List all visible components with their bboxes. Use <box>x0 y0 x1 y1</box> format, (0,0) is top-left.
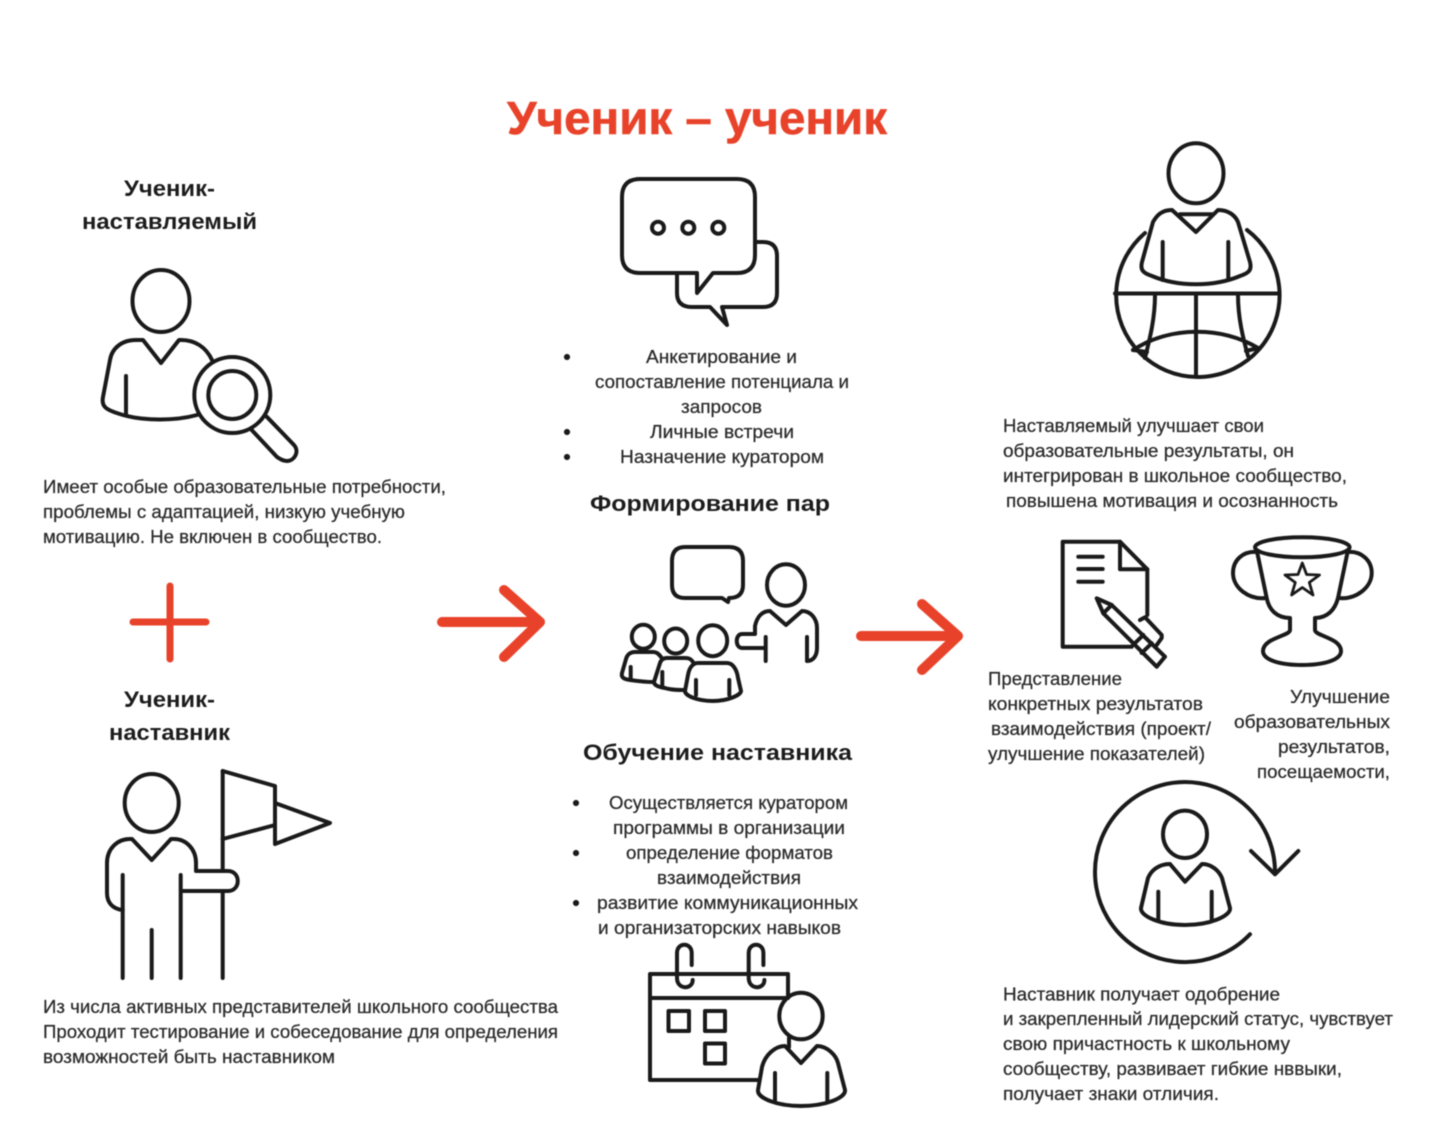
list: mentor training steps <box>573 793 858 938</box>
icon: person with flag <box>107 771 330 978</box>
text: mentor description <box>43 997 559 1067</box>
title: Ученик – ученик <box>507 92 888 144</box>
icon: trophy <box>1233 537 1372 665</box>
list: mentor training steps: Осуществляется куратором <box>609 793 848 813</box>
heading: mentor: Ученик- <box>124 687 215 712</box>
list: mentor training steps: развитие коммуникационных <box>597 893 858 913</box>
text: concrete results: улучшение показателей) <box>988 744 1205 764</box>
icon: person with magnifier <box>103 270 296 461</box>
text: mentee description: мотивацию. Не включен в сообщество. <box>43 527 382 547</box>
icon: teacher with group <box>622 547 817 701</box>
list: pair formation steps <box>564 347 849 467</box>
text: mentor outcome: Наставник получает одобрение <box>1003 984 1280 1004</box>
text: improved results: Улучшение <box>1290 687 1390 707</box>
icon: person in circular arrow <box>1095 782 1298 962</box>
text: mentor outcome: сообществу, развивает гибкие нввыки, <box>1003 1059 1342 1079</box>
heading: mentor: наставник <box>109 720 231 745</box>
icon: plus <box>133 586 206 659</box>
text: mentor outcome: и закрепленный лидерский статус, чувствует <box>1003 1009 1393 1029</box>
heading: mentor <box>109 687 231 745</box>
list: pair formation steps: Назначение куратором <box>620 447 824 467</box>
list: mentor training steps: и организаторских навыков <box>598 918 841 938</box>
text: mentee description: проблемы с адаптацией, низкую учебную <box>43 502 405 522</box>
list: pair formation steps: запросов <box>681 397 762 417</box>
text: mentor outcome: свою причастность к школьному <box>1003 1034 1290 1054</box>
list: mentor training steps: взаимодействия <box>657 868 801 888</box>
heading: mentee: Ученик- <box>124 176 215 201</box>
text: mentor outcome: получает знаки отличия. <box>1003 1084 1219 1104</box>
text: mentee description <box>43 477 446 547</box>
text: mentor description: Из числа активных представителей школьного сообщества <box>43 997 559 1017</box>
text: concrete results <box>988 669 1211 764</box>
panel: left column <box>43 176 559 1067</box>
text: mentor description: Проходит тестирование и собеседование для определения <box>43 1022 558 1042</box>
arrow: middle to right <box>861 604 958 670</box>
text: mentee outcome: Наставляемый улучшает свои <box>1003 416 1264 436</box>
heading: mentor training: Обучение наставника <box>583 740 853 765</box>
panel: middle column <box>564 179 858 1106</box>
text: mentee outcome: повышена мотивация и осознанность <box>1006 491 1338 511</box>
icon: calendar with person <box>650 945 845 1106</box>
list: mentor training steps: определение форматов <box>626 843 833 863</box>
text: mentee outcome: интегрирован в школьное сообщество, <box>1003 466 1347 486</box>
text: improved results: посещаемости, <box>1257 762 1390 782</box>
text: concrete results: конкретных результатов <box>988 694 1203 714</box>
panel: right column <box>988 143 1393 1104</box>
heading: mentee: наставляемый <box>82 209 257 234</box>
text: concrete results: Представление <box>988 669 1122 689</box>
heading: mentee <box>82 176 257 234</box>
text: mentee outcome <box>1003 416 1347 511</box>
text: mentor description: возможностей быть наставником <box>43 1047 335 1067</box>
list: pair formation steps: Анкетирование и <box>646 347 797 367</box>
text: concrete results: взаимодействия (проект/ <box>991 719 1211 739</box>
text: improved results: образовательных <box>1234 712 1390 732</box>
text: improved results: результатов, <box>1278 737 1390 757</box>
heading: pair formation: Формирование пар <box>590 491 830 516</box>
text: mentee outcome: образовательные результаты, он <box>1003 441 1294 461</box>
icon: speech bubbles <box>622 179 777 325</box>
text: mentor outcome <box>1003 984 1393 1104</box>
icon: document with pen <box>1063 542 1165 667</box>
text: mentee description: Имеет особые образовательные потребности, <box>43 477 446 497</box>
icon: person on globe <box>1115 143 1280 377</box>
list: pair formation steps: сопоставление потенциала и <box>595 372 849 392</box>
arrow: left to middle <box>442 590 540 657</box>
list: mentor training steps: программы в организации <box>613 818 845 838</box>
text: improved results <box>1234 687 1390 782</box>
list: pair formation steps: Личные встречи <box>650 422 794 442</box>
